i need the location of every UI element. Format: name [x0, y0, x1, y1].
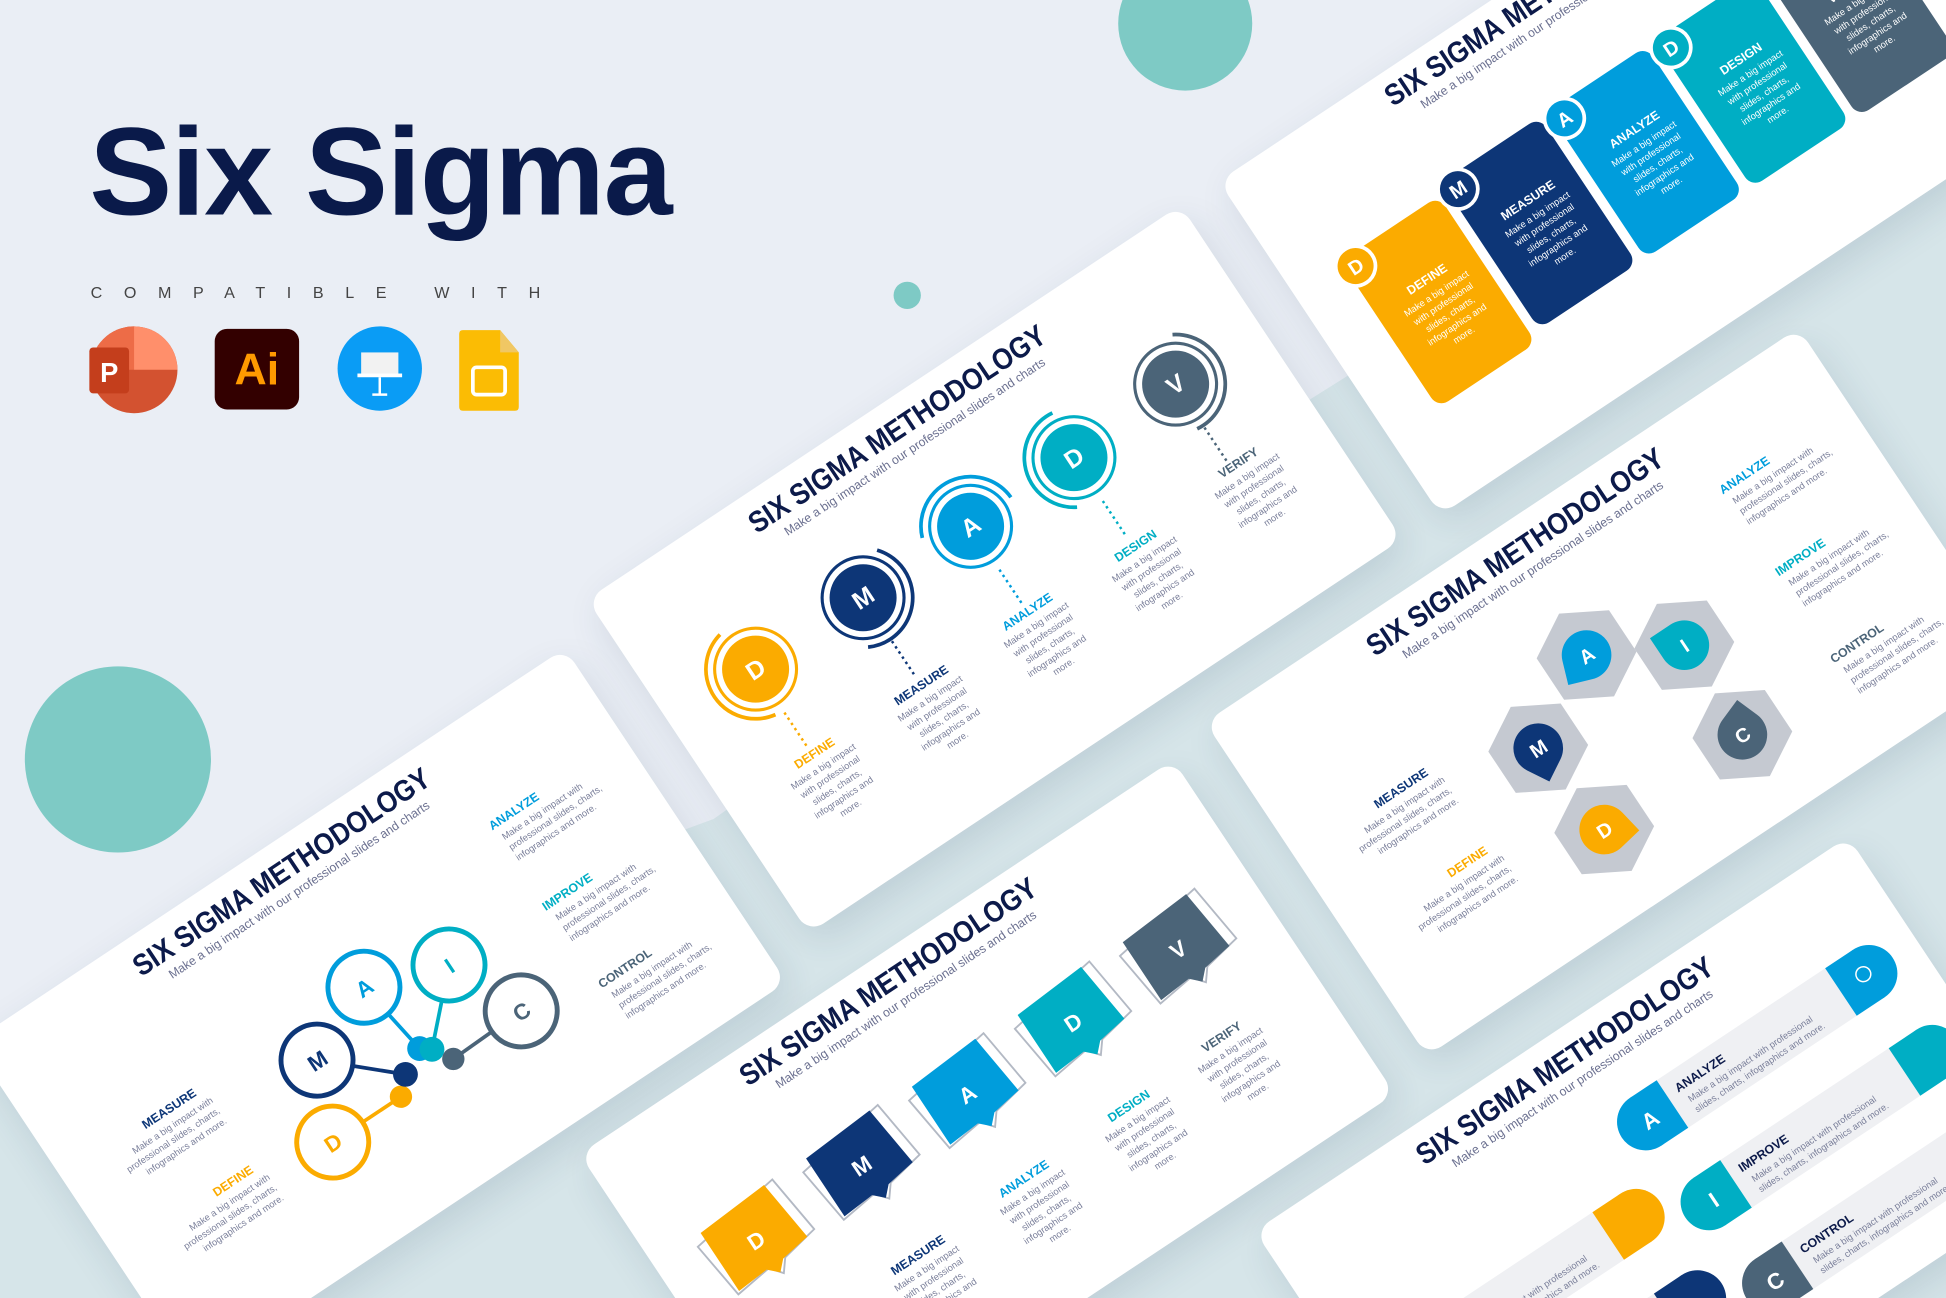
text blocks: IMPROVE: [540, 870, 595, 914]
panel: DMAIC pills slide: [1255, 837, 1946, 1298]
circle A: [882, 438, 1074, 638]
heading: SIX SIGMA METHODOLOGY: [1360, 442, 1670, 663]
card D: slides, charts,: [1424, 294, 1477, 334]
card D: [1328, 190, 1536, 413]
labels: VERIFY: [1199, 1019, 1245, 1055]
hexagon diagram: M: [1526, 736, 1552, 763]
labels: Make a big impact: [1103, 1094, 1172, 1144]
molecule diagram: C: [508, 997, 536, 1027]
pill D: [1381, 1178, 1676, 1298]
badges: V: [1165, 935, 1192, 964]
card A: slides, charts,: [1631, 145, 1684, 184]
icon: keynote: [338, 326, 422, 411]
labels: more.: [1047, 1223, 1073, 1244]
badges: M: [847, 1151, 876, 1182]
text blocks: Make a big impact with: [1362, 775, 1447, 835]
labels: VERIFY: [1216, 444, 1261, 481]
card M: M: [1446, 177, 1472, 204]
card D: more.: [1451, 324, 1477, 346]
card D: with professional: [1411, 281, 1475, 328]
pill A: slides, charts, infographics and more.: [1693, 1021, 1827, 1114]
card A: A: [1553, 106, 1577, 133]
hexagon diagram: [1446, 542, 1808, 900]
labels: Make a big impact: [896, 673, 965, 724]
text blocks: professional slides, charts,: [182, 1182, 279, 1251]
icons: app logos: [89, 326, 519, 414]
labels: slides, charts,: [1234, 477, 1287, 517]
text blocks: infographics and more.: [1800, 548, 1885, 608]
text blocks: ANALYZE: [1717, 454, 1772, 497]
badges: A: [954, 1080, 981, 1109]
card A: Make a big impact: [1610, 119, 1678, 169]
pill C: [1731, 1095, 1946, 1298]
labels: more.: [1051, 656, 1076, 677]
labels: Make a big impact: [789, 741, 858, 792]
card M: more.: [1552, 245, 1578, 267]
pill M: [1442, 1259, 1737, 1298]
circle D2: [980, 364, 1181, 572]
labels: with professional: [905, 686, 969, 733]
hexagon diagram: I: [1677, 636, 1694, 657]
circle D: D: [741, 654, 771, 686]
labels: more.: [838, 797, 863, 819]
text blocks: professional slides, charts,: [125, 1106, 222, 1175]
pill C: Make a big impact with professional: [1811, 1175, 1940, 1265]
text blocks: Make a big impact with: [1731, 445, 1815, 506]
panel: DMADV cards slide: [1219, 0, 1946, 515]
labels: infographics and: [1127, 1127, 1189, 1173]
card M: with professional: [1512, 202, 1576, 249]
labels: more.: [1152, 1150, 1178, 1171]
text blocks: IMPROVE: [1773, 536, 1828, 579]
decor: small teal dot: [894, 282, 921, 309]
pill A: [1606, 934, 1908, 1161]
labels: more.: [1262, 507, 1287, 528]
labels: with professional: [1119, 546, 1183, 593]
labels: Make a big impact: [1213, 451, 1282, 501]
labels: infographics and: [1022, 1200, 1084, 1246]
labels: [775, 436, 1316, 837]
decor: big teal circle: [25, 666, 211, 853]
labels: MEASURE: [888, 1232, 948, 1278]
text blocks: Make a big impact with: [500, 781, 584, 842]
card M: MEASURE: [1498, 177, 1558, 223]
card M: slides, charts,: [1525, 215, 1578, 255]
card D: Make a big impact: [1402, 268, 1471, 319]
text blocks: professional slides, charts,: [561, 864, 657, 933]
labels: more.: [945, 729, 970, 751]
labels: with professional: [798, 754, 862, 801]
heading: SIX SIGMA METHODOLOGY: [734, 871, 1043, 1093]
molecule diagram: M: [303, 1046, 332, 1077]
text blocks: infographics and more.: [514, 802, 598, 862]
card V: [1750, 0, 1946, 122]
text blocks: Make a big impact with: [554, 862, 638, 922]
text blocks: infographics and more.: [623, 960, 708, 1021]
molecule diagram: A: [351, 973, 378, 1003]
card V: more.: [1872, 33, 1897, 55]
labels: with professional: [1011, 612, 1075, 659]
card D: D: [1344, 254, 1368, 280]
labels: [770, 1010, 1297, 1298]
labels: infographics and: [920, 707, 982, 753]
heading: Make a big impact with our professional slides and charts: [1449, 987, 1716, 1170]
text blocks: infographics and more.: [201, 1193, 286, 1253]
text blocks: professional slides, charts,: [617, 941, 713, 1010]
heading: Make a big impact with our professional slides and charts: [1400, 478, 1666, 661]
card V: infographics and: [1846, 10, 1909, 56]
circle M: M: [848, 582, 880, 616]
labels: with professional: [1205, 1037, 1269, 1085]
molecule diagram: I: [440, 954, 459, 978]
labels: slides, charts,: [1125, 1120, 1178, 1160]
hexagon diagram: C: [1731, 723, 1755, 749]
card D2: D: [1660, 36, 1684, 62]
labels: DESIGN: [1105, 1087, 1153, 1125]
pill A: Make a big impact with professional: [1686, 1014, 1814, 1104]
labels: infographics and: [1026, 633, 1088, 679]
card A: infographics and: [1633, 152, 1696, 198]
card A: ANALYZE: [1607, 108, 1662, 151]
text blocks: infographics and more.: [1376, 795, 1460, 856]
text blocks: professional slides, charts,: [1794, 529, 1890, 598]
decor: top teal circle: [1118, 0, 1252, 91]
text blocks: Make a big impact with: [610, 939, 694, 1000]
labels: more.: [1245, 1081, 1270, 1102]
text blocks: professional slides, charts,: [1849, 616, 1945, 685]
labels: with professional: [1007, 1179, 1071, 1226]
text blocks: CONTROL: [1828, 620, 1887, 666]
labels: Make a big impact: [1002, 600, 1071, 650]
text blocks: infographics and more.: [1855, 635, 1940, 696]
icon: illustrator: Ai: [235, 346, 279, 395]
card D2: more.: [1765, 104, 1791, 125]
labels: slides, charts,: [1132, 560, 1185, 600]
labels: infographics and: [813, 775, 875, 821]
panel: DMADV badges slide: [580, 760, 1395, 1298]
text blocks: Make a big impact with: [1787, 527, 1871, 588]
card M: infographics and: [1527, 223, 1589, 269]
text blocks: infographics and more.: [567, 882, 652, 943]
molecule diagram: [221, 872, 574, 1192]
text blocks: [1301, 421, 1946, 974]
subtitle: compatible with: COMPATIBLE WITH: [91, 283, 562, 302]
heading: SIX SIGMA METHODOLOGY: [127, 762, 437, 983]
badges: D: [743, 1226, 770, 1256]
text blocks: [77, 756, 720, 1298]
text blocks: CONTROL: [596, 945, 655, 991]
card D: DEFINE: [1404, 261, 1450, 298]
card D2: infographics and: [1740, 81, 1802, 127]
text blocks: MEASURE: [139, 1086, 199, 1132]
icon: powerpoint: [89, 326, 177, 413]
text blocks: DEFINE: [210, 1163, 256, 1200]
labels: with professional: [1222, 463, 1286, 510]
panel: DMAIC hexagons slide: [1205, 328, 1946, 1056]
labels: slides, charts,: [1024, 626, 1076, 666]
pill I: IMPROVE: [1736, 1132, 1791, 1175]
badges: D: [1060, 1008, 1087, 1037]
heading: SIX SIGMA METHODOLOGY: [742, 319, 1052, 540]
labels: slides, charts,: [811, 767, 863, 807]
labels: DEFINE: [792, 735, 837, 772]
labels: ANALYZE: [1000, 590, 1055, 634]
pill A: A: [1637, 1105, 1664, 1135]
text blocks: professional slides, charts,: [1416, 863, 1513, 932]
circle A: A: [956, 511, 986, 544]
text blocks: Make a big impact with: [130, 1095, 215, 1156]
circle D2: D: [1060, 442, 1090, 475]
labels: Make a big impact: [893, 1243, 961, 1293]
hexagon diagram: A: [1575, 643, 1599, 669]
card D2: DESIGN: [1717, 40, 1765, 78]
pill C: C: [1762, 1266, 1789, 1296]
text blocks: DEFINE: [1445, 844, 1490, 880]
pill I: [1670, 1014, 1946, 1241]
icon: powerpoint: P: [100, 357, 118, 388]
card M: [1430, 113, 1637, 334]
card M: Make a big impact: [1503, 189, 1572, 240]
pill I: Make a big impact with professional: [1750, 1094, 1878, 1184]
labels: slides, charts,: [1020, 1193, 1073, 1233]
circle V: [1082, 290, 1283, 498]
labels: infographics and: [1134, 567, 1196, 613]
labels: slides, charts,: [1218, 1051, 1271, 1091]
text blocks: infographics and more.: [1744, 466, 1829, 526]
panel: DMADV circles slide: [587, 205, 1402, 933]
text blocks: infographics and more.: [1436, 874, 1520, 934]
circle V: V: [1162, 369, 1191, 401]
pill A: ANALYZE: [1672, 1052, 1728, 1095]
labels: Make a big impact: [1196, 1025, 1265, 1075]
text blocks: professional slides, charts,: [1357, 785, 1454, 854]
labels: DESIGN: [1112, 527, 1159, 565]
labels: MEASURE: [892, 662, 951, 708]
labels: infographics and: [1237, 484, 1299, 530]
text blocks: Make a big impact with: [188, 1172, 272, 1233]
text blocks: ANALYZE: [486, 790, 542, 833]
card D2: [1643, 0, 1850, 193]
pill I: slides, charts, infographics and more.: [1757, 1101, 1891, 1194]
card D2: Make a big impact: [1716, 48, 1785, 98]
labels: slides, charts,: [917, 699, 970, 739]
text blocks: Make a big impact with: [1842, 614, 1926, 675]
heading: Make a big impact with our professional slides and charts: [782, 355, 1048, 539]
heading: Make a big impact with our professional slides and charts: [773, 908, 1039, 1091]
circle M: [766, 501, 972, 713]
badges: [685, 885, 1252, 1298]
icon: google slides: [459, 330, 519, 411]
icon: illustrator: [215, 329, 299, 410]
pill I: I: [1704, 1188, 1723, 1212]
card V: slides, charts,: [1844, 3, 1897, 43]
labels: Make a big impact: [1110, 534, 1179, 584]
text blocks: infographics and more.: [144, 1116, 229, 1177]
card D2: with professional: [1725, 60, 1789, 107]
pill C: CONTROL: [1797, 1211, 1856, 1256]
heading: Make a big impact with our professional slides and charts: [166, 798, 432, 982]
hexagon diagram: D: [1593, 818, 1617, 844]
labels: with professional: [1112, 1106, 1176, 1154]
card A: [1537, 42, 1744, 264]
card D: infographics and: [1426, 302, 1488, 348]
card A: with professional: [1618, 131, 1682, 178]
labels: Make a big impact: [998, 1167, 1067, 1217]
card D2: slides, charts,: [1738, 74, 1791, 114]
title: Six Sigma: [89, 103, 671, 242]
molecule diagram: D: [320, 1128, 347, 1158]
text blocks: professional slides, charts,: [507, 783, 604, 852]
labels: ANALYZE: [996, 1157, 1052, 1201]
panel: DMAIC molecule slide: [0, 648, 787, 1298]
card A: more.: [1659, 175, 1684, 196]
circle D: [676, 589, 854, 777]
labels: infographics and: [1220, 1058, 1282, 1104]
heading: SIX SIGMA METHODOLOGY: [1410, 950, 1720, 1172]
labels: more.: [1159, 590, 1185, 611]
text blocks: MEASURE: [1371, 765, 1431, 811]
text blocks: Make a big impact with: [1422, 853, 1506, 914]
text blocks: professional slides, charts,: [1738, 447, 1834, 516]
